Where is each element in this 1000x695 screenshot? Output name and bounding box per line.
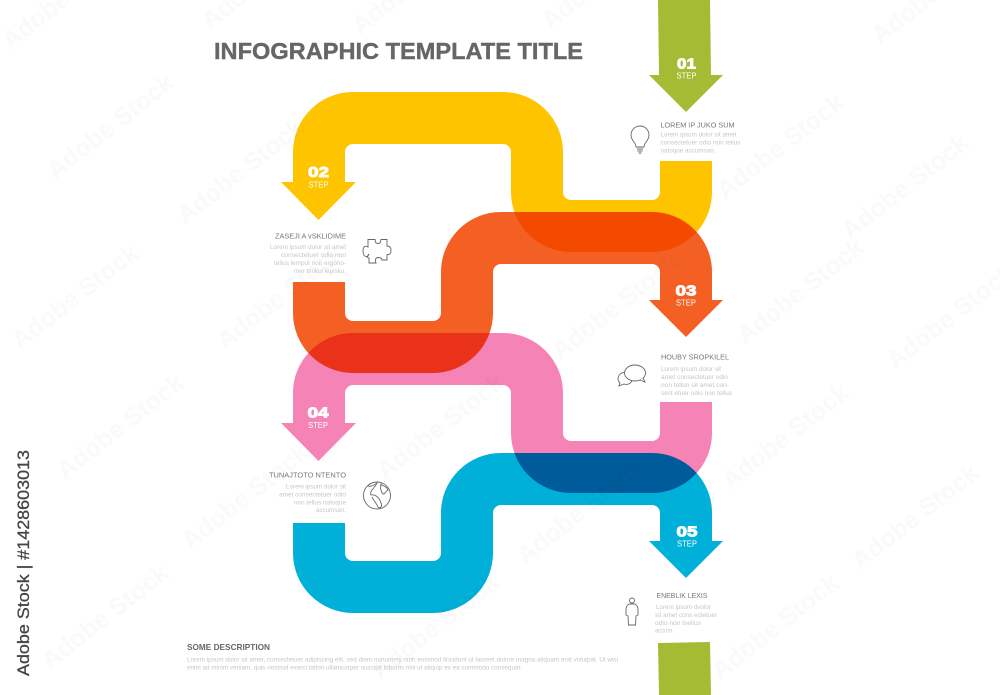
text block: step 1: consectetuer odio non tellus [660,140,740,146]
text block: step 4: accumsan. [316,507,346,514]
text block: step 5: accum. [655,628,674,634]
text block: step 4: amet consectetuer odio [279,492,346,498]
step 1 arrow: green: STEP [676,72,696,80]
text block: step 4: TUNAJTOTO NTENTO [269,470,346,480]
watermark: Adobe Stock [716,379,854,495]
step 4 label: 04 [308,404,329,422]
icon: globe [364,482,390,509]
watermark: Adobe Stock [706,569,844,685]
text block: step 5: ENEBLIK LEXIS [656,591,708,600]
watermark: Adobe Stock [171,114,309,230]
text block: step 5: sit amet cons ectetuer [655,612,718,619]
text block: description: enim ad minim veniam, quis nostrud exerci tation ullamcorper suscipit lobortis nisl ut aliquip ex ea commodo consequat. [187,664,522,672]
text block: description [187,642,618,672]
step 3 label: 03 [676,282,696,300]
text block: step 3: HOUBY SROPKILEL [661,352,729,362]
watermark: Adobe Stock [711,89,849,205]
text block: step 2: consectetuer odio non [281,252,346,259]
icon: light bulb [631,126,649,153]
watermark: Adobe Stock [41,69,179,185]
text block: step 5: Lorem ipsum dvolor [656,604,712,611]
step 2 label: STEP [308,180,328,190]
stock credit: Adobe Stock | #1428603013 [14,450,33,676]
watermark: Adobe Stock [846,459,984,575]
step 4 label [308,404,329,430]
step 3 label [676,282,696,308]
title: INFOGRAPHIC TEMPLATE TITLE [214,38,583,64]
text block: step 2: tellus lemput non ergono- [274,260,346,267]
step 3 label: STEP [676,298,696,308]
step 5 label: STEP [677,540,697,548]
step 1 arrow: green [649,0,723,112]
step 2 label [308,164,329,190]
text block: step 5: odio non tvellus [655,620,701,627]
text block: step 1: Lorem ipsum dolor sit amet [660,132,737,138]
text block: step 5 [655,591,718,634]
text block: step 1: natoque accumsan. [660,148,716,154]
watermark: Adobe Stock [6,239,144,355]
watermark: Adobe Stock [371,369,509,485]
step 5 label: 05 [676,524,698,540]
text block: step 2: ZASEJI A vSKLIDIME [275,232,346,240]
text block: step 3: non tellun sit amet con- [661,382,729,389]
step 4 ribbon: pink arrow [281,359,686,467]
text block: step 2 [270,232,346,275]
watermark: Adobe Stock [176,439,314,555]
icon: puzzle piece [363,240,391,263]
text block: step 1: LOREM IP JUKO SUM [660,120,734,130]
text block: description: Lorem ipsum dolor sit amet, consectetuer adipiscing elit, sed diam nonummy nibh euismod tincidunt ut laoreet dolore magna aliquam erat volutpat. Ut wisi [187,656,618,664]
step 3 ribbon: orange arrow [319,238,723,347]
text block: description: SOME DESCRIPTION [187,642,270,652]
step 5 label [676,524,698,548]
text block: step 4 [269,470,346,514]
watermark: Adobe Stock [36,559,174,675]
step 1 arrow: green: 01 [677,56,696,72]
watermark: Adobe Stock [836,129,974,245]
text block: step 2: Lorem ipsum dolor sit amet [270,244,346,251]
watermark: Adobe Stock [731,234,869,350]
text block: step 3: Lorem ipsum dolor sit [661,366,721,373]
text block: step 2: mer timkul lepisku. [294,268,346,275]
step 5 ribbon: blue arrow [319,479,723,587]
step 2 ribbon: yellow arrow [281,118,686,226]
text block: step 4: Lorem ipsum dolor sit [286,484,346,490]
watermark: Adobe Stock [211,239,349,355]
green bottom block [658,642,711,695]
watermark: Adobe Stock [366,569,504,685]
step 2 label: 02 [308,164,329,181]
text block: step 4: non tellus natoque [294,500,346,506]
text block: step 3 [661,352,732,397]
step 4 label: STEP [308,421,328,430]
icon: person [626,598,638,625]
text block: step 3: sect etuer odio non tellus [661,390,732,397]
watermark: Adobe Stock [546,249,684,365]
icon: speech bubbles [618,365,646,386]
text block: step 1 [660,120,740,154]
text block: step 3: amet consectetuer odio [661,374,728,381]
watermark: Adobe Stock [511,454,649,570]
watermark: Adobe Stock [51,369,189,485]
